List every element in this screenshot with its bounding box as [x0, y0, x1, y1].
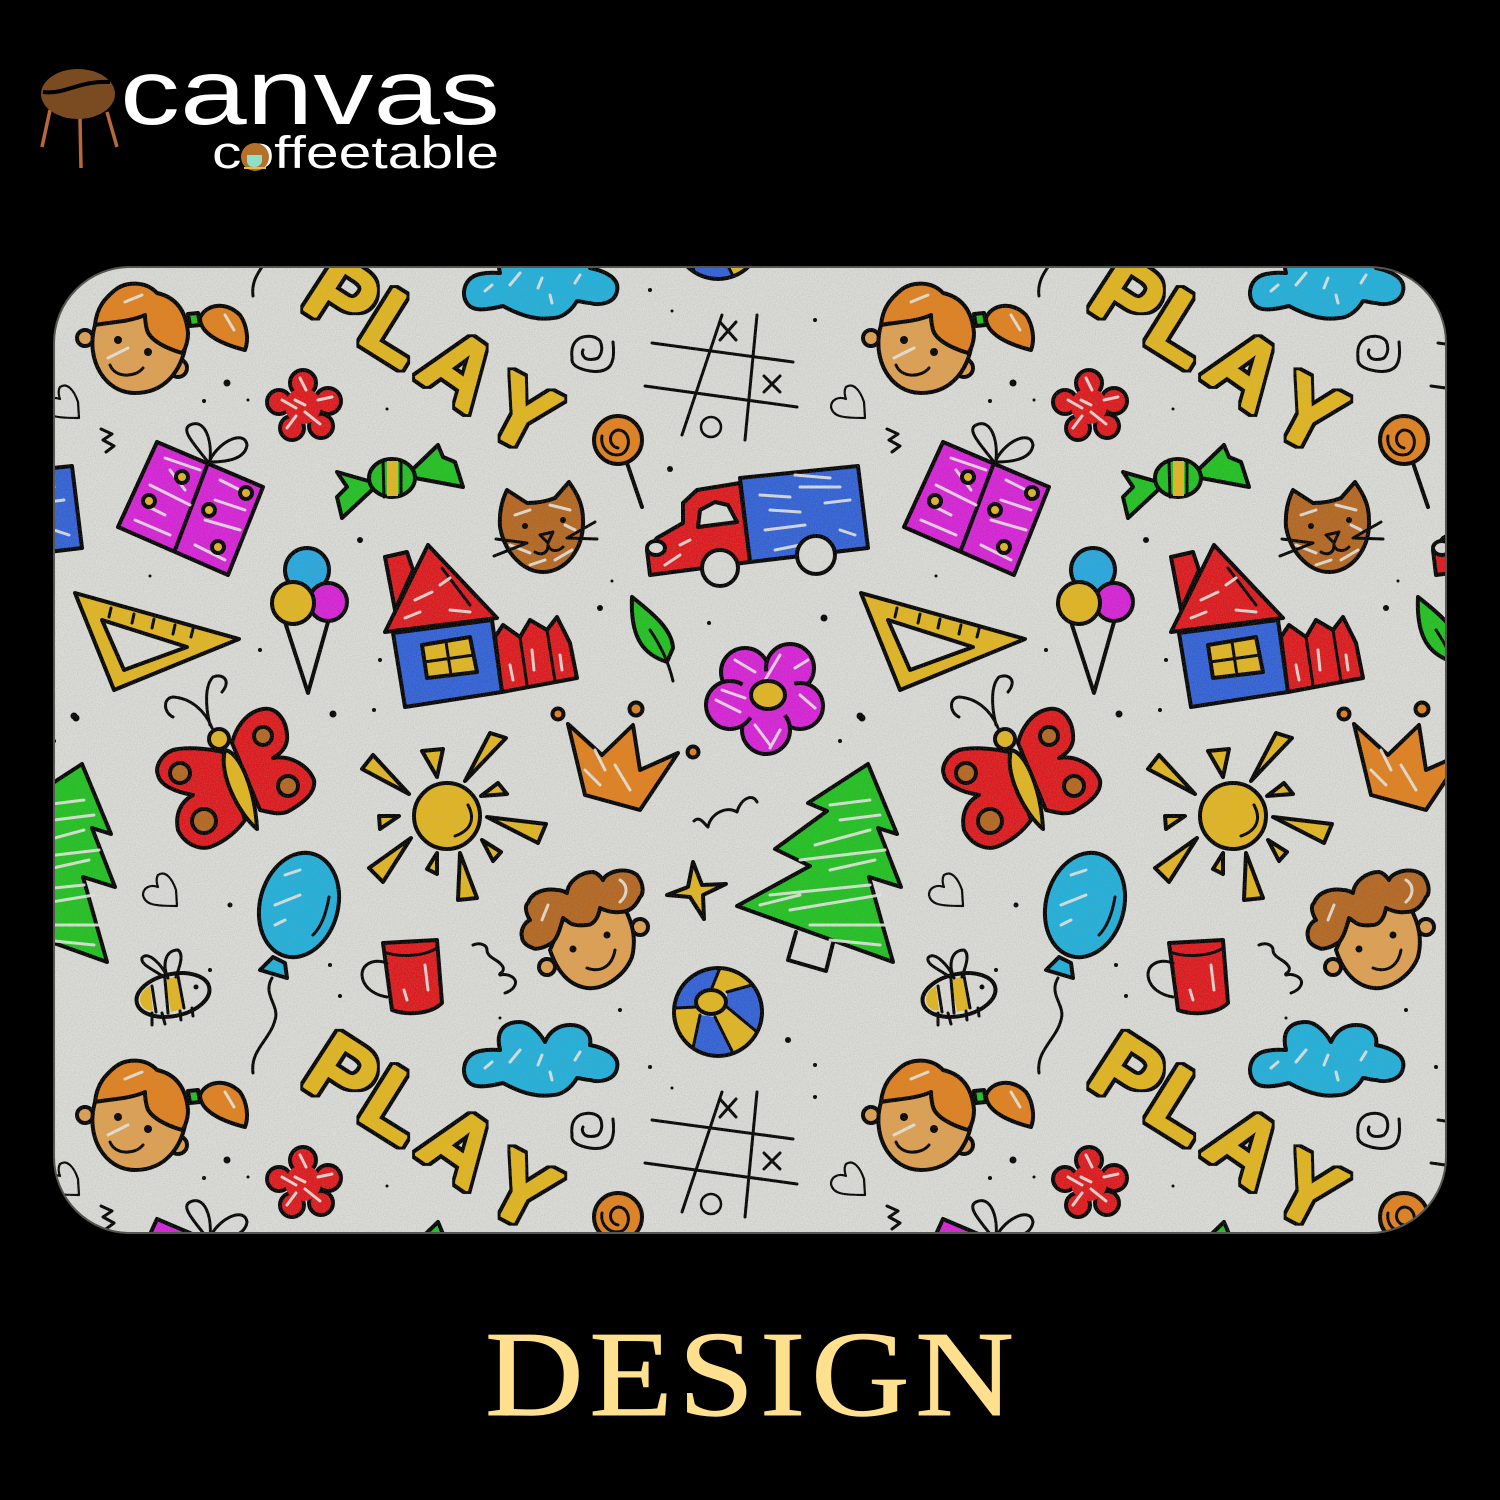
icon: butterfly	[157, 676, 314, 848]
icon: crown	[552, 702, 698, 810]
lettering: PLAY top left: P	[288, 236, 397, 357]
title: DESIGN: DESIGN	[485, 1308, 1020, 1442]
icon: bee	[132, 950, 214, 1025]
lettering: PLAY bottom right: L	[1130, 1046, 1234, 1164]
lower doodles also wrapping to the top edge	[248, 844, 762, 1096]
lettering: PLAY top left	[288, 236, 574, 474]
middle rows of doodles	[70, 466, 901, 1067]
icon: ruler triangle	[75, 593, 239, 690]
icon: girl with pigtails	[77, 284, 247, 393]
pattern repeat	[856, 284, 1500, 1096]
pattern repeat	[0, 284, 115, 1096]
icon: cat face	[494, 482, 597, 572]
pattern repeat: bottom row	[863, 1061, 1500, 1360]
pattern repeat: top edge	[1034, 67, 1500, 319]
icon: red mug	[362, 940, 442, 1013]
icon: coffee cup	[241, 143, 269, 171]
lettering: PLAY bottom right	[1074, 1013, 1360, 1251]
lettering: PLAY bottom left: Y	[471, 1130, 574, 1251]
icon: magenta flower	[706, 644, 823, 754]
upper row of doodles	[77, 284, 865, 582]
lettering: PLAY top left: L	[344, 269, 448, 387]
lettering: PLAY top right: Y	[1257, 353, 1360, 474]
lettering: PLAY top right: L	[1130, 269, 1234, 387]
icon: red flower	[267, 370, 341, 440]
lettering: PLAY top right	[1074, 236, 1360, 474]
icon: coffee bean table	[41, 69, 117, 168]
lettering: PLAY bottom left: A	[403, 1084, 517, 1208]
icon: spiral	[572, 336, 614, 371]
pattern tile	[70, 284, 901, 1096]
icon: heart upper	[831, 385, 865, 418]
icon: green candy	[337, 445, 463, 518]
lettering: PLAY bottom left: L	[344, 1046, 448, 1164]
logo: canvas coffeetable	[41, 40, 500, 178]
pattern repeat: bottom row	[0, 1061, 79, 1360]
lettering: PLAY top left: A	[403, 307, 517, 431]
lettering: PLAY top left: Y	[471, 353, 574, 474]
icon: green leaf	[632, 597, 673, 681]
icon: truck	[647, 466, 868, 586]
lettering: PLAY bottom right: A	[1189, 1084, 1303, 1208]
icon: blue balloon	[248, 844, 350, 1073]
lettering: PLAY bottom left	[288, 1013, 574, 1251]
icon: house with fence	[385, 545, 577, 707]
icon: purple gift box	[118, 424, 263, 575]
lettering: PLAY bottom left: P	[288, 1013, 397, 1134]
pattern repeat: bottom row	[77, 1061, 865, 1360]
squiggle	[101, 429, 114, 452]
icon: lollipop	[594, 416, 642, 507]
lettering: PLAY bottom right: P	[1074, 1013, 1183, 1134]
lettering: PLAY bottom right: Y	[1257, 1130, 1360, 1251]
lettering: PLAY top right: A	[1189, 307, 1303, 431]
icon: heart lower	[143, 873, 177, 906]
lettering: PLAY top right: P	[1074, 236, 1183, 357]
logo wordmark: coffeetable: coffeetable	[212, 127, 499, 178]
icon: blue cloud	[464, 1022, 617, 1096]
icon: sun	[362, 733, 546, 900]
icon: beach ball	[674, 968, 762, 1056]
icon: boy face	[522, 871, 648, 988]
scattered dots upper	[148, 288, 817, 582]
panel: patterned mat	[53, 266, 1447, 1234]
icon: tic tac toe	[645, 315, 797, 440]
squiggles and birds	[473, 797, 757, 993]
pattern repeat: top edge	[248, 67, 762, 319]
scattered dots middle	[70, 605, 866, 1067]
icon: christmas tree	[737, 764, 901, 971]
logo wordmark: canvas: canvas	[120, 40, 500, 144]
icon: ice cream cone	[272, 548, 347, 693]
icon: gold star	[667, 862, 726, 919]
